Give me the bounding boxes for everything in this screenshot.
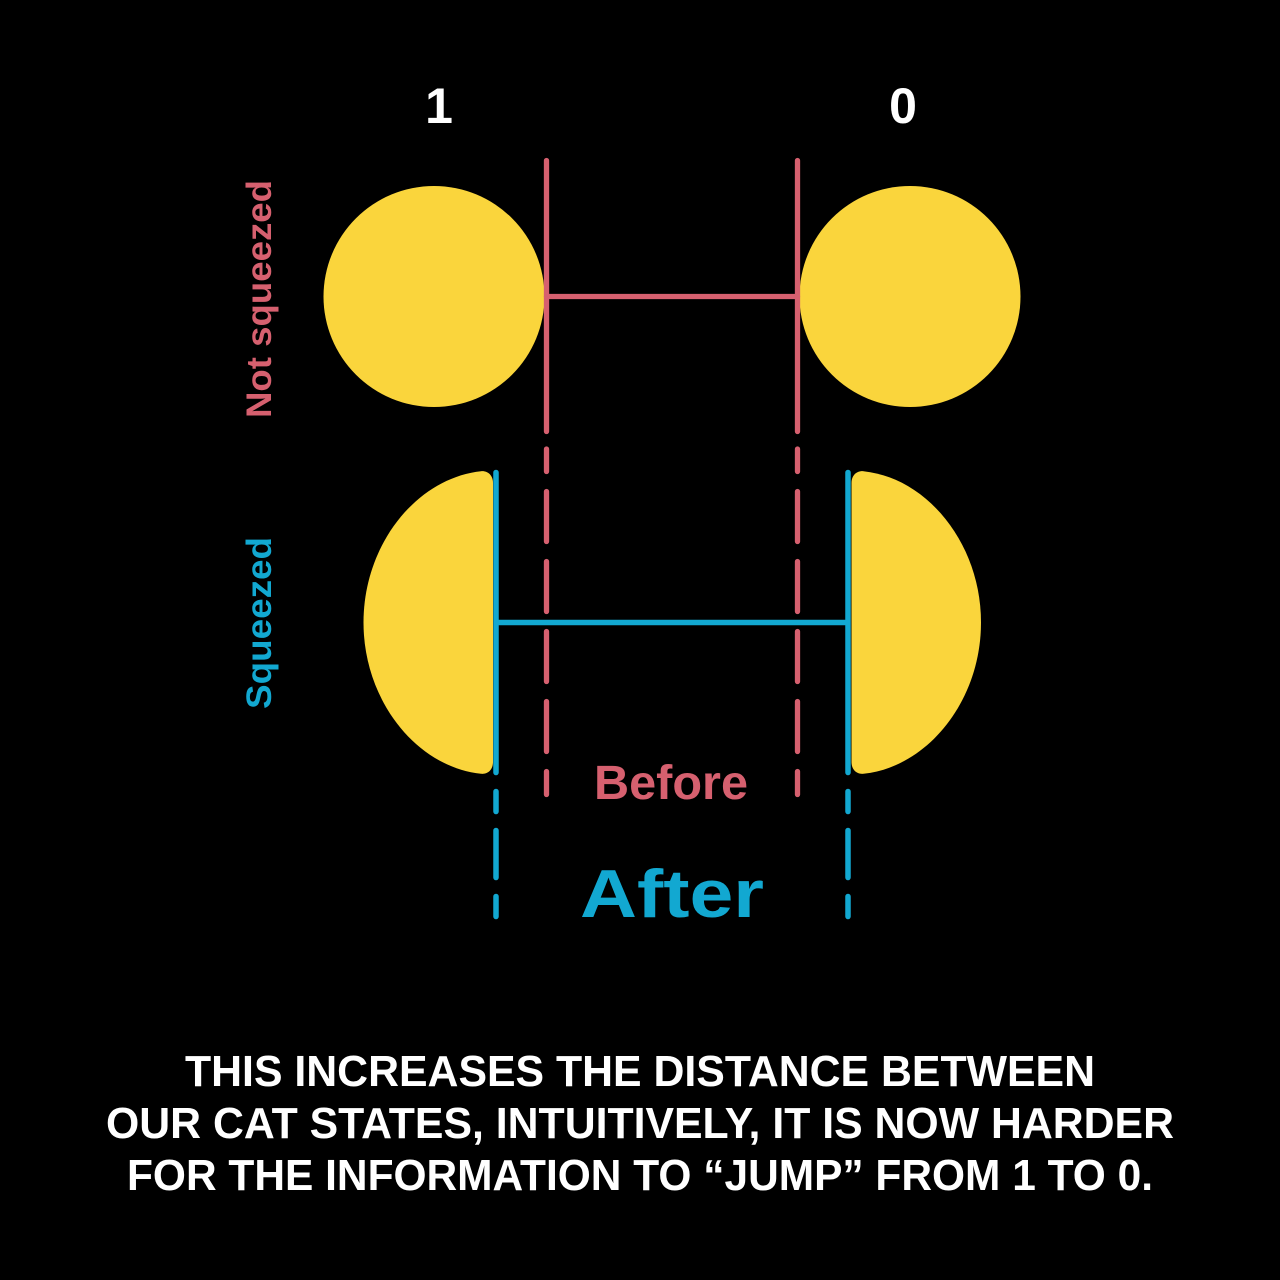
caption: OUR CAT STATES, INTUITIVELY, IT IS NOW HARDER — [106, 1099, 1174, 1148]
label: Not squeezed: Not squeezed — [240, 180, 279, 418]
squeezed shape: state 1 — [364, 471, 493, 774]
label: Squeezed: Squeezed — [240, 537, 279, 709]
caption: THIS INCREASES THE DISTANCE BETWEEN — [185, 1047, 1095, 1096]
label: 1: 1 — [425, 78, 453, 134]
label: After: After — [580, 856, 764, 932]
before distance marker — [546, 160, 798, 794]
circle: state 0 not squeezed — [800, 186, 1020, 407]
squeezed shape: state 0 — [852, 471, 981, 774]
label: Before: Before — [594, 757, 748, 810]
caption — [106, 1047, 1174, 1200]
after distance marker — [496, 472, 848, 916]
label: 0: 0 — [889, 78, 917, 134]
caption: FOR THE INFORMATION TO “JUMP” FROM 1 TO 0. — [127, 1151, 1153, 1200]
circle: state 1 not squeezed — [324, 186, 544, 407]
